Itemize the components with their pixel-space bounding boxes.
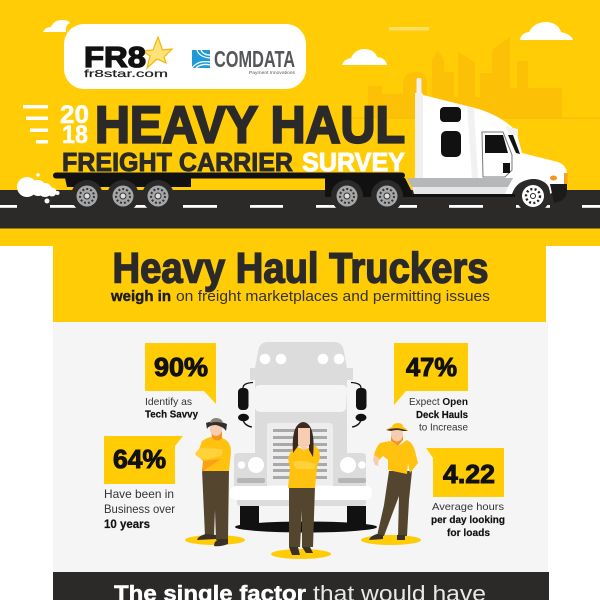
callout: 4.22: per day looking	[431, 514, 505, 526]
under bumper	[237, 497, 366, 506]
windshield	[508, 135, 520, 154]
callout: 64%: Business over	[104, 502, 175, 516]
frame rail	[410, 194, 515, 197]
drive wheels	[331, 180, 403, 212]
callout: 47%: to Increase	[419, 422, 468, 434]
callout: 4.22: 4.22	[443, 459, 495, 489]
callout: 4.22	[426, 448, 505, 539]
subtitle: FREIGHT CARRIER SURVEY	[62, 147, 405, 177]
bumper	[230, 486, 372, 500]
road	[0, 190, 600, 228]
callout: 4.22: for loads	[447, 527, 490, 539]
amber lights	[550, 176, 557, 180]
sleeper strip	[415, 92, 423, 180]
callout: 90%: 90%	[154, 352, 208, 382]
door handle	[503, 163, 510, 173]
roof lights	[260, 354, 344, 364]
contrail line	[389, 27, 429, 30]
cab body	[415, 93, 567, 194]
subheading: on freight marketplaces and permitting issues	[176, 288, 490, 305]
callout: 64%: 10 years	[104, 517, 150, 531]
speed lines	[23, 105, 48, 144]
exhaust smoke	[17, 173, 60, 204]
panel: heading	[53, 229, 546, 322]
fenders	[234, 453, 267, 488]
door window	[485, 135, 508, 153]
sleeper windows	[440, 107, 461, 122]
side skirts	[407, 178, 513, 187]
headlights	[238, 457, 366, 473]
Comdata logo: Payment Innovations	[249, 70, 296, 76]
door	[482, 132, 512, 177]
subtitle: FREIGHT CARRIER SURVEY: FREIGHT CARRIER	[62, 147, 293, 177]
front wheel	[516, 179, 550, 213]
heading: Heavy Haul Truckers: Heavy Haul Truckers	[112, 244, 488, 292]
fender shadow	[510, 179, 550, 194]
trailer chassis	[65, 178, 191, 187]
trailer wheels	[71, 180, 174, 212]
year 2018: 20	[60, 101, 89, 129]
callout: 47%: 47%	[406, 352, 457, 382]
shadow	[235, 522, 377, 532]
FR8 logo: FR8	[84, 42, 146, 74]
callout: 47%: Expect Open	[409, 396, 468, 408]
panel: statistics	[53, 322, 548, 572]
cloud: upper left	[43, 20, 70, 32]
logo panel	[64, 24, 306, 89]
illustration: truck front	[230, 342, 377, 532]
cab	[250, 342, 353, 455]
truck	[53, 78, 568, 213]
person: center trucker	[271, 422, 331, 559]
cab visor	[505, 126, 518, 135]
callout: 90%: Identify as	[145, 396, 192, 408]
cloud: upper right	[520, 22, 573, 40]
year 2018: 18	[62, 121, 88, 149]
tires	[240, 506, 259, 526]
fog lamps	[237, 478, 265, 483]
subtitle: FREIGHT CARRIER SURVEY: SURVEY	[302, 147, 405, 177]
callout: 4.22: Average hours	[432, 501, 504, 513]
flatbed deck	[53, 172, 405, 178]
callout: 90%: Tech Savvy	[145, 408, 198, 420]
Comdata logo	[192, 46, 296, 76]
panel: single factor	[53, 572, 549, 600]
bumper	[550, 184, 567, 203]
callout: 90%	[145, 343, 216, 420]
person: right trucker	[361, 423, 421, 545]
callout: 64%: Have been in	[104, 487, 174, 501]
mirrors	[238, 388, 366, 421]
cab seam	[467, 106, 478, 178]
FR8 logo: fr8star.com	[84, 68, 168, 80]
exhaust stack	[416, 78, 422, 98]
rear frame	[325, 178, 412, 197]
header background	[0, 0, 600, 246]
grille	[267, 423, 333, 485]
city skyline	[350, 37, 600, 119]
callout: 47%: Deck Hauls	[416, 409, 468, 421]
section heading	[114, 581, 486, 600]
Comdata logo: COMDATA	[214, 46, 295, 72]
year 2018	[60, 101, 89, 149]
callout: 64%: 64%	[113, 444, 166, 474]
FR8 logo	[84, 37, 172, 80]
subheading: weigh in	[110, 288, 171, 305]
callout: 64%	[104, 436, 183, 531]
cloud: center	[342, 49, 387, 65]
callout: 47%	[394, 343, 468, 434]
windshield	[255, 385, 347, 412]
person: left trucker	[185, 418, 245, 546]
title: HEAVY HAUL: HEAVY HAUL	[95, 96, 405, 154]
